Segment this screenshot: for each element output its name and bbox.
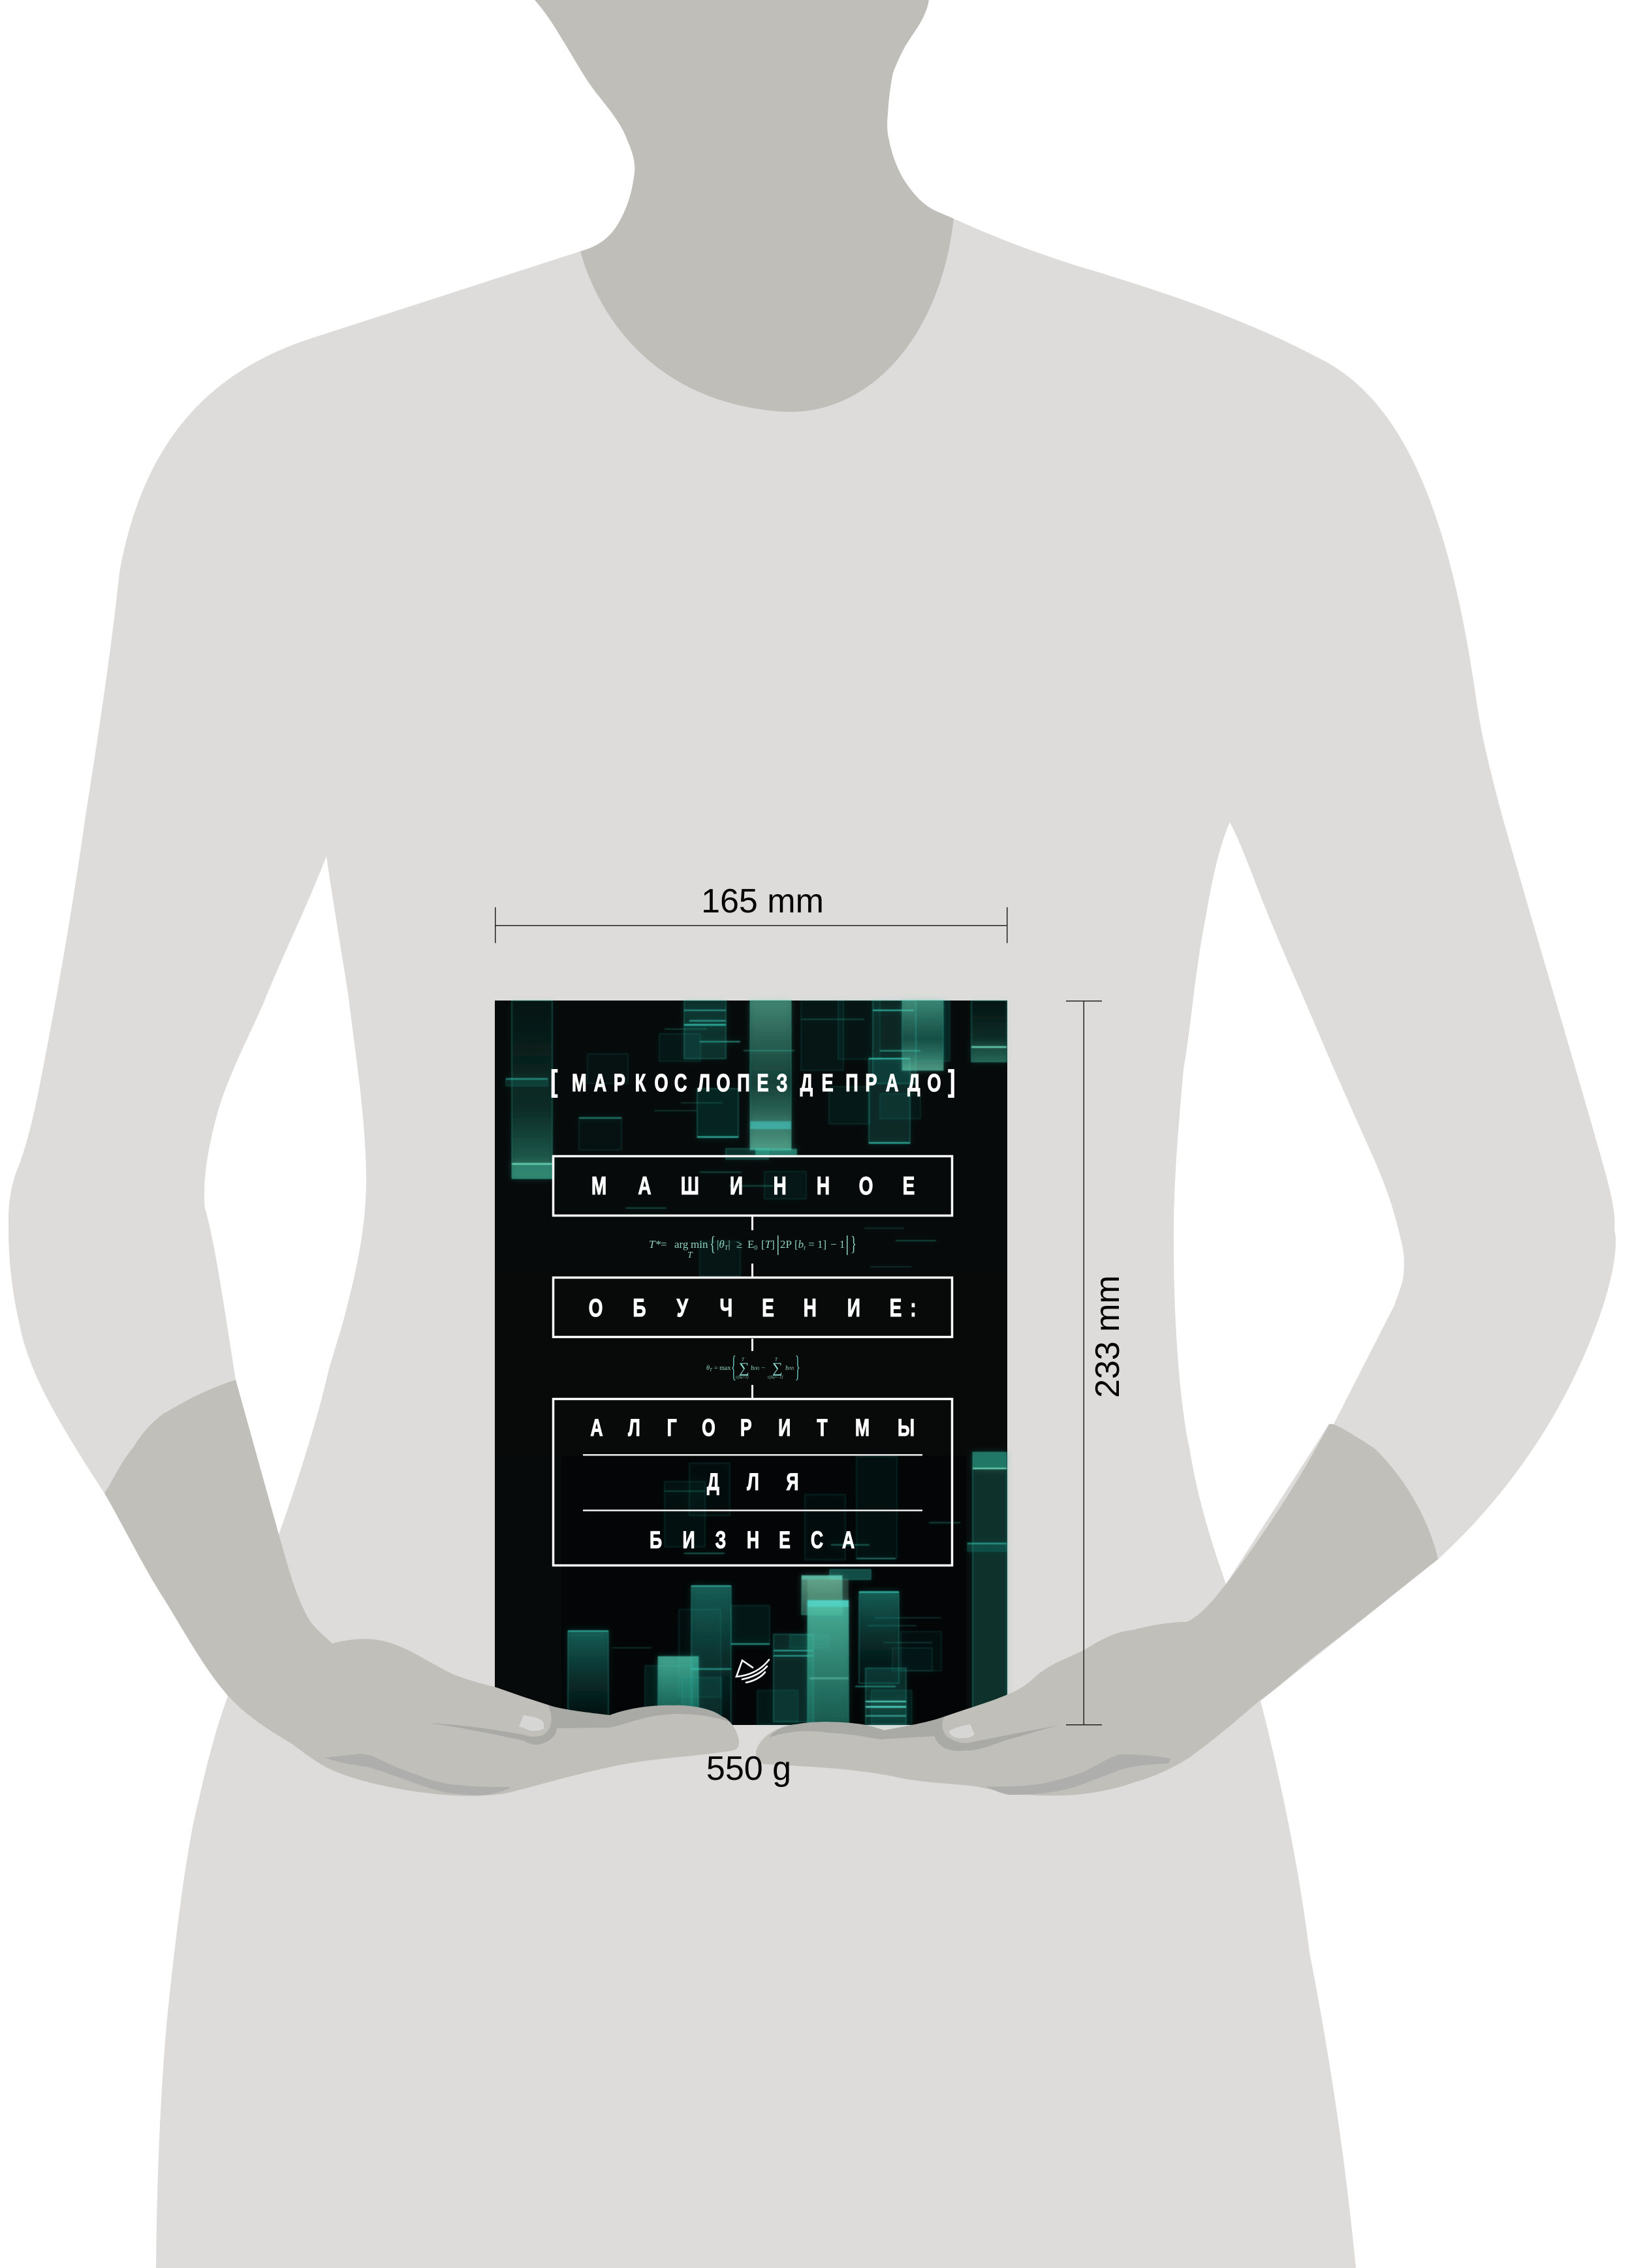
title box: АЛГОРИТМЫ ДЛЯ БИЗНЕСА: АЛГОРИТМЫ — [590, 1414, 915, 1441]
formula: theta T: = max — [714, 1365, 730, 1372]
formula: optimal T: = — [661, 1238, 667, 1251]
formula: optimal T: ≥ — [736, 1238, 742, 1251]
title box: ОБУЧЕНИЕ: ОБУЧЕНИЕ: — [589, 1294, 917, 1322]
book cover — [495, 1001, 1007, 1725]
formula: optimal T: E — [747, 1238, 754, 1251]
formula: optimal T: − 1 — [830, 1238, 845, 1251]
title box: АЛГОРИТМЫ ДЛЯ БИЗНЕСА — [554, 1399, 952, 1565]
thumbnail — [949, 1724, 975, 1738]
formula: optimal T: } — [851, 1232, 856, 1255]
formula: theta T: ∑ — [739, 1359, 749, 1376]
formula: theta T: btvt − — [751, 1365, 766, 1372]
palm shadow — [986, 1754, 1170, 1795]
main bars, bottom — [679, 1609, 721, 1697]
formula: optimal T: | — [728, 1238, 730, 1251]
formula: optimal T — [649, 1232, 856, 1260]
formula: theta T — [706, 1350, 800, 1384]
formula: optimal T: 2P — [780, 1238, 792, 1251]
formula: theta T: } — [795, 1350, 800, 1384]
formula: optimal T: T — [687, 1251, 693, 1260]
title box: МАШИННОЕ: МАШИННОЕ — [591, 1172, 915, 1200]
formula: theta T: ∑ — [772, 1359, 783, 1376]
faint background rectangles, top — [801, 1001, 843, 1070]
formula: theta T: t — [742, 1376, 743, 1380]
formula: optimal T: t — [804, 1245, 806, 1252]
title box: АЛГОРИТМЫ ДЛЯ БИЗНЕСА: ДЛЯ — [707, 1468, 799, 1495]
thumbnail — [519, 1715, 544, 1731]
left hand and forearm — [104, 1380, 739, 1796]
formula: theta T: θ — [706, 1365, 710, 1372]
gap between left arm and torso — [204, 856, 366, 1534]
gap between right arm and torso — [1174, 822, 1404, 1584]
formula: theta T: T — [775, 1357, 778, 1362]
title box: МАШИННОЕ — [554, 1157, 952, 1215]
formula: optimal T: arg — [674, 1238, 689, 1251]
faint rectangles inside lower title box — [665, 1491, 705, 1492]
connector — [751, 1264, 753, 1277]
title box: ОБУЧЕНИЕ — [554, 1278, 952, 1337]
formula: theta T: t — [774, 1376, 775, 1380]
finger shadow — [428, 1705, 730, 1745]
author name: [ МАРКОС ЛОПЕЗ ДЕ ПРАДО] — [550, 1065, 955, 1098]
right hand and forearm — [756, 1424, 1438, 1795]
formula: optimal T: 0 — [754, 1245, 757, 1252]
formula: optimal T: |θ — [717, 1238, 725, 1251]
silhouette: neck — [535, 0, 954, 412]
formula: theta T: t|[b — [768, 1376, 774, 1380]
palm shadow — [325, 1754, 510, 1795]
formula: optimal T: = 1] — [806, 1238, 826, 1251]
dimension: width 165 mm: 165 mm — [701, 882, 824, 920]
formula: optimal T: T — [725, 1245, 729, 1252]
formula: theta T: btvt — [785, 1365, 794, 1372]
cover artwork: glowing teal bars — [506, 1001, 1007, 1724]
formula: theta T: T — [710, 1367, 713, 1373]
formula: theta T: T — [742, 1357, 745, 1362]
formula: theta T: t|[b — [736, 1376, 742, 1380]
title box: АЛГОРИТМЫ ДЛЯ БИЗНЕСА: БИЗНЕСА — [650, 1527, 855, 1553]
formula: optimal T: T* — [649, 1238, 661, 1251]
cover background — [495, 1001, 1007, 1725]
connector — [751, 1385, 753, 1398]
connector — [751, 1339, 753, 1351]
main bars, top — [512, 1001, 552, 1179]
formula: optimal T: min — [691, 1238, 708, 1251]
formula: theta T: =1] — [742, 1376, 749, 1380]
formula: optimal T: [T] — [761, 1238, 775, 1251]
finger shadow — [769, 1717, 1061, 1751]
formula: theta T: { — [731, 1350, 736, 1384]
icon: publisher logo — [736, 1660, 769, 1683]
connector — [751, 1217, 753, 1230]
formula: optimal T: [b — [794, 1238, 804, 1251]
weight label: 550 g — [706, 1750, 791, 1788]
formula: optimal T: { — [710, 1232, 715, 1255]
dimension: height 233 mm: 233 mm — [1089, 1275, 1127, 1398]
formula: theta T: =−1] — [774, 1376, 783, 1380]
